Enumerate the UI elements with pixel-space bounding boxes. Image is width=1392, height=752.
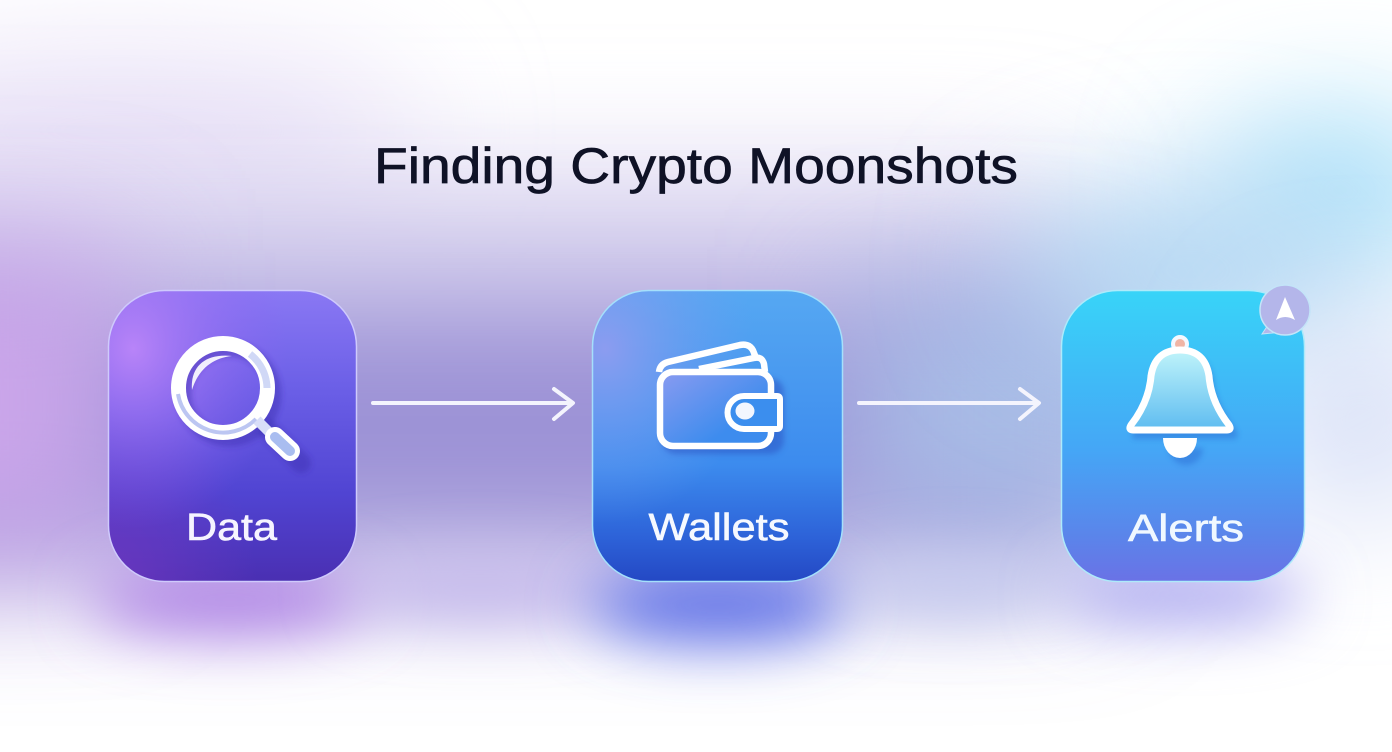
icon: bell [1130, 337, 1238, 465]
panel: Alerts [1062, 285, 1310, 582]
panel: Wallets [592, 290, 842, 582]
label: Wallets: Wallets [648, 507, 790, 549]
label: Alerts: Alerts [1128, 508, 1244, 550]
panel: Data [108, 290, 356, 582]
icon: wallet [659, 345, 784, 454]
icon: magnifying glass [178, 344, 301, 463]
title: Finding Crypto Moonshots [374, 138, 1018, 194]
arrow: Data to Wallets [373, 389, 573, 419]
icon: notification badge [1260, 285, 1310, 335]
arrow: Wallets to Alerts [859, 389, 1039, 419]
label: Data: Data [186, 507, 278, 549]
